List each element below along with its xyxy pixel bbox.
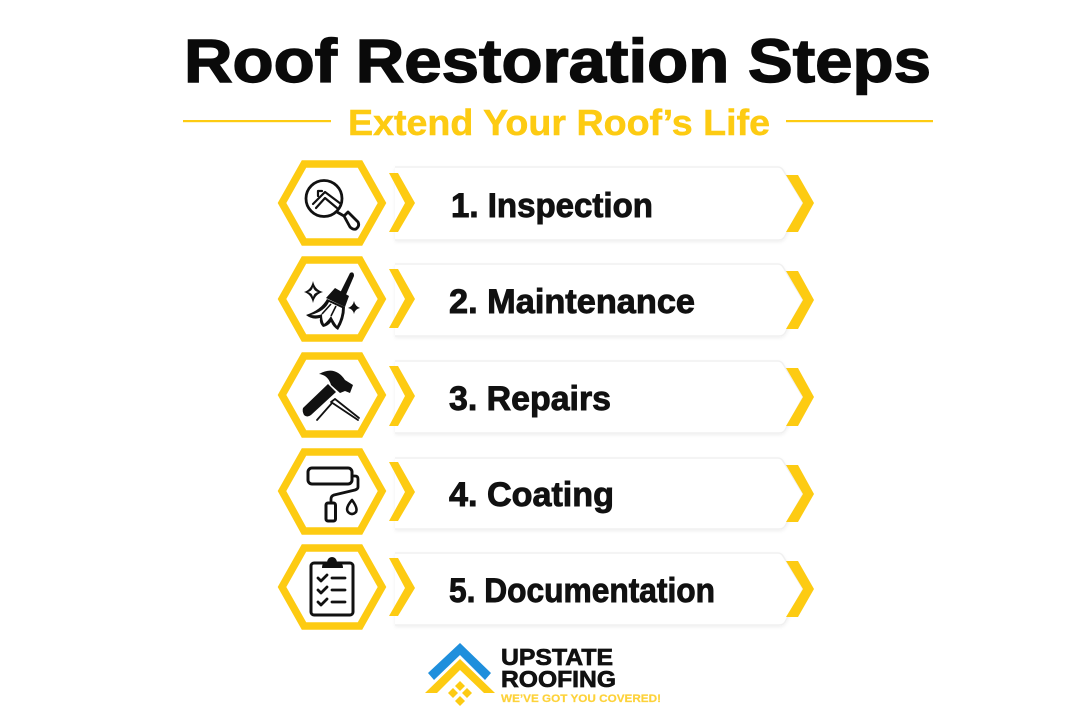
icon: clipboard checklist <box>311 557 353 615</box>
step 5 right chevron <box>786 561 814 617</box>
step 4 label: 4. Coating <box>449 476 614 514</box>
step 1 right chevron <box>786 175 814 232</box>
step 3 card <box>395 361 803 433</box>
step 3 hexagon badge <box>282 356 382 434</box>
subtitle with rules: Extend Your Roof’s Life <box>348 102 770 143</box>
logo roof mark <box>425 643 495 706</box>
step 1 left chevron <box>389 173 415 232</box>
step 2 label: 2. Maintenance <box>449 283 695 321</box>
logo: Upstate Roofing: ROOFING <box>501 666 616 692</box>
icon: hammer over roof <box>303 371 359 420</box>
step 3: repairs <box>282 356 814 434</box>
icon: magnifier over roof <box>306 180 359 229</box>
step 2: maintenance <box>282 260 814 338</box>
step 4 left chevron <box>389 462 415 521</box>
step 5 left chevron <box>389 558 415 616</box>
step 3 left chevron <box>389 366 415 426</box>
step 5 label: 5. Documentation <box>449 572 715 610</box>
logo wordmark: UPSTATE <box>501 644 613 670</box>
logo: Upstate Roofing <box>425 643 661 706</box>
step 5 card <box>395 553 803 625</box>
step 5: documentation <box>282 548 814 626</box>
step 2 left chevron <box>389 269 415 328</box>
step 2 card <box>395 264 803 336</box>
icon: broom and sparkles <box>304 272 360 330</box>
step 1 hexagon badge <box>282 164 382 242</box>
step 1: inspection <box>282 164 814 242</box>
step 2 hexagon badge <box>282 260 382 338</box>
step 4 card <box>395 458 803 529</box>
step 4 right chevron <box>786 465 814 522</box>
step 3 label: 3. Repairs <box>449 380 611 418</box>
step 1 card <box>395 167 803 240</box>
step 1 label: 1. Inspection <box>451 187 653 225</box>
step 2 right chevron <box>786 271 814 329</box>
step 4 hexagon badge <box>282 452 382 531</box>
title: Roof Restoration Steps <box>184 27 931 95</box>
step 3 right chevron <box>786 368 814 426</box>
icon: paint roller and drop <box>308 468 358 521</box>
logo tagline: WE’VE GOT YOU COVERED! <box>501 693 661 705</box>
step 4: coating <box>282 452 814 531</box>
step 5 hexagon badge <box>282 548 382 626</box>
